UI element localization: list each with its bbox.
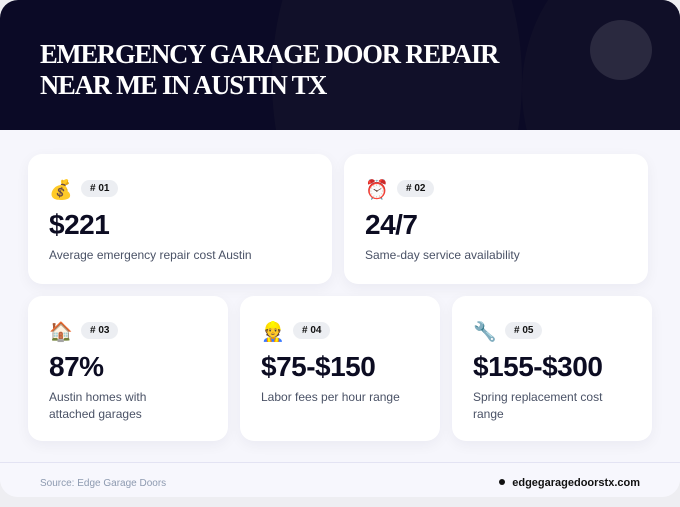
card 04: Labor fees per hour range — [261, 390, 400, 404]
card 03: 87% — [49, 351, 104, 382]
card 05 — [452, 296, 652, 441]
card 01: $221 — [49, 209, 109, 240]
footer — [0, 462, 680, 497]
card 03: # 03 — [90, 325, 109, 336]
card 04: $75-$150 — [261, 351, 375, 382]
footer: Source: Edge Garage Doors — [40, 478, 166, 489]
card 02: 24/7 — [365, 209, 418, 240]
card 02 — [344, 154, 648, 284]
icon: wrench: 🔧 — [473, 320, 497, 343]
card 05: $155-$300 — [473, 351, 602, 382]
card 03: Austin homes with — [49, 390, 146, 404]
title — [40, 39, 500, 100]
icon: house: 🏠 — [49, 320, 73, 343]
icon: worker: 👷 — [261, 320, 285, 343]
card 01: Average emergency repair cost Austin — [49, 248, 252, 262]
card 05: Spring replacement cost — [473, 390, 602, 404]
header — [0, 0, 680, 130]
footer: edgegaragedoorstx.com — [512, 477, 640, 489]
card 03: attached garages — [49, 407, 142, 421]
title: EMERGENCY GARAGE DOOR REPAIR — [40, 39, 498, 69]
card 03 — [28, 296, 228, 441]
title: NEAR ME IN AUSTIN TX — [40, 70, 326, 100]
card 04: # 04 — [302, 325, 321, 336]
card 01 — [28, 154, 332, 284]
icon: money bag: 💰 — [49, 178, 73, 201]
icon: alarm clock: ⏰ — [365, 178, 389, 201]
card 02: Same-day service availability — [365, 248, 520, 262]
card 05: # 05 — [514, 325, 533, 336]
card 01: # 01 — [90, 183, 109, 194]
card 04 — [240, 296, 440, 441]
card 02: # 02 — [406, 183, 425, 194]
card 05: range — [473, 407, 504, 421]
